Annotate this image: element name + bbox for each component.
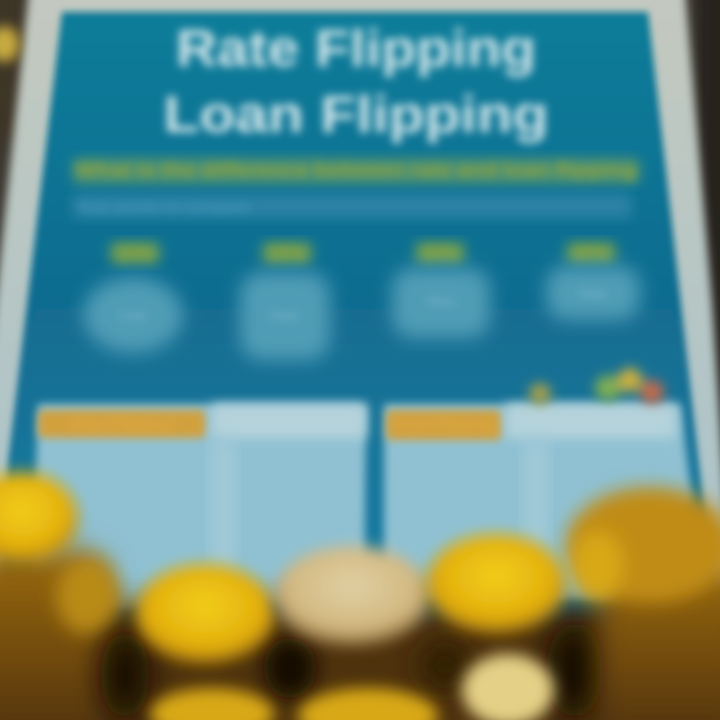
coins: bottom row xyxy=(150,654,554,720)
table: left: Rate Flipping xyxy=(71,416,173,433)
dark gap between coins: centre xyxy=(264,638,316,698)
column 3 stat: Term xyxy=(427,294,455,309)
title: Loan Flipping xyxy=(164,86,548,144)
subtitle band: What is the difference between rate and loan flipping xyxy=(76,160,636,180)
coin: centre pale xyxy=(274,546,430,646)
column 1 stat: 10% xyxy=(118,244,152,263)
column 2 stat: Fees xyxy=(271,308,300,323)
right table header xyxy=(386,410,502,440)
table: right xyxy=(384,404,692,600)
subtitle band xyxy=(72,158,640,184)
column 3 stat: 30% xyxy=(423,244,457,263)
coin: right centre xyxy=(426,534,566,634)
title xyxy=(164,20,548,144)
coin stack: far left xyxy=(0,472,120,720)
icon: coloured logo xyxy=(529,368,664,405)
table: left xyxy=(32,404,366,610)
column 2 stat xyxy=(240,242,330,360)
column 4 stat: 40% xyxy=(574,244,608,263)
coin stack: far right xyxy=(566,487,720,720)
column 4 stat xyxy=(546,242,640,320)
column 1 stat xyxy=(83,242,183,353)
description line: Key points to compare xyxy=(80,199,250,215)
column 1 stat: Cost xyxy=(120,308,147,323)
column 2 stat: 20% xyxy=(270,244,304,263)
coin sides under the top coins xyxy=(0,605,720,720)
column 3 stat xyxy=(392,242,490,338)
left table header xyxy=(38,410,206,438)
coin pile xyxy=(0,472,720,720)
coin: left centre xyxy=(135,564,275,664)
icon: coin at left edge xyxy=(0,26,20,62)
description line xyxy=(72,194,632,218)
dark gaps between coins xyxy=(101,622,603,719)
table: right: Loan Flipping xyxy=(395,416,493,433)
title: Rate Flipping xyxy=(176,20,536,78)
column 4 stat: Rate xyxy=(579,286,607,301)
